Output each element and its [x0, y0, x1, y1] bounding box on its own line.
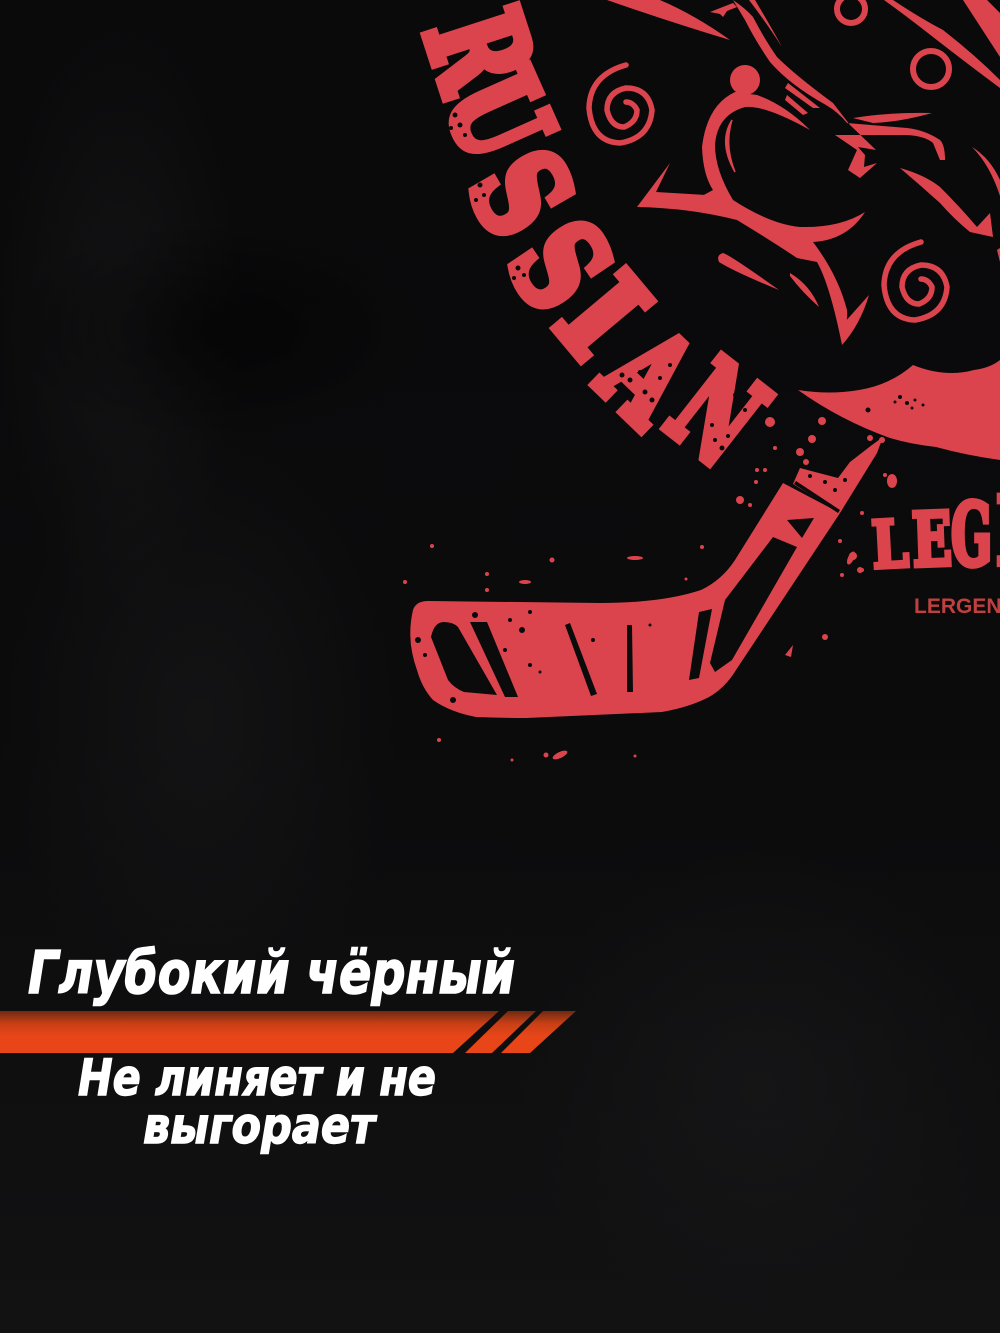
emblem: creature body curve [637, 65, 869, 345]
stick wear speckle [415, 474, 847, 703]
paint splatter around stick [403, 417, 897, 762]
emblem text: LEGENDS: L [870, 505, 910, 583]
emblem: top wedge [607, 0, 730, 40]
icon: hockey stick [403, 417, 897, 762]
emblem text: RUSSIAN arc: S [440, 128, 601, 260]
emblem text: LEGENDS: E [911, 496, 953, 584]
emblem: rings [837, 0, 949, 87]
stick shaft: worn top [793, 437, 883, 513]
graphic print: red emblem [395, 0, 1000, 762]
emblem text: RUSSIAN arc: U [415, 52, 580, 180]
emblem: lower red swoosh [798, 360, 1000, 460]
emblem text: LEGENDS: G [951, 486, 992, 586]
subtext [78, 1049, 436, 1155]
emblem: right side flourishes [884, 0, 1000, 262]
emblem text: RUSSIAN arc [395, 0, 792, 493]
emblem text: LEGENDS [871, 492, 1000, 570]
emblem text: RUSSIAN arc: N [643, 332, 792, 493]
subtext: Не линяет и не [78, 1049, 436, 1107]
emblem: neck and beak lines [710, 0, 945, 178]
distress speckle on letters [449, 112, 747, 450]
emblem text: RUSSIAN arc: S [479, 197, 639, 336]
callout: deep black [0, 938, 576, 1155]
subtext: выгорает [143, 1097, 378, 1155]
emblem text: RUSSIAN arc: I [529, 248, 675, 383]
emblem: spirals [589, 65, 947, 320]
emblem text: RUSSIAN arc: A [572, 300, 724, 453]
heading: Глубокий чёрный [28, 938, 515, 1007]
emblem: short dashes [718, 253, 819, 307]
orange stripe divider [0, 1011, 576, 1053]
